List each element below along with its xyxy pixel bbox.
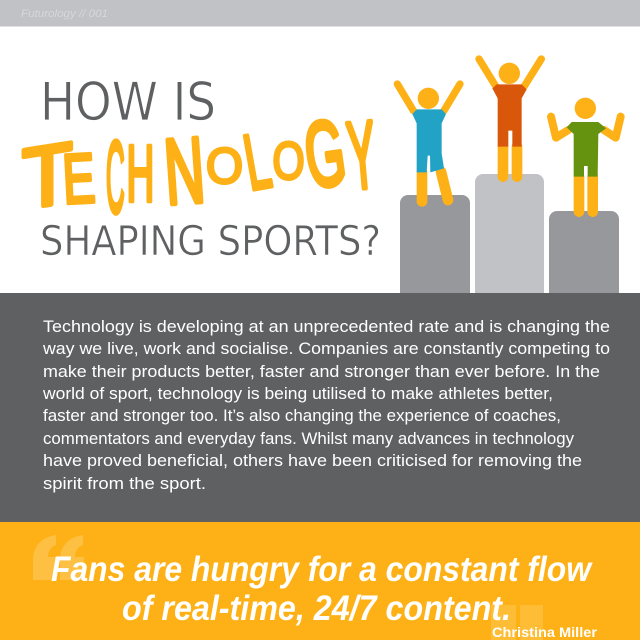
title word: technology: N <box>161 119 208 225</box>
figure: orange athlete <box>479 59 541 177</box>
title word: technology <box>22 100 380 234</box>
intro text: Technology is developing at an unprecedented rate and is changing the <box>43 318 610 336</box>
title word: technology: L <box>238 118 277 207</box>
top bar <box>0 0 640 26</box>
quote text <box>51 550 594 628</box>
podium blocks <box>400 174 619 293</box>
quote panel <box>0 522 640 640</box>
intro text: way we live, work and socialise. Companies are constantly competing to <box>42 340 610 358</box>
title word: technology: O <box>206 139 243 194</box>
title word: technology: H <box>126 130 154 219</box>
title word: technology: C <box>106 120 125 234</box>
intro text: world of sport, technology is being utilised to make athletes better, <box>42 385 553 403</box>
title word: technology: E <box>61 139 97 219</box>
opening quote mark <box>33 535 84 580</box>
intro panel <box>0 293 640 522</box>
title line: how is: HOW IS <box>40 72 216 133</box>
top bar: Futurology // 001 <box>21 8 108 20</box>
quote text: Fans are hungry for a constant flow <box>51 550 594 589</box>
figure: green athlete <box>551 98 621 212</box>
podium illustration <box>397 59 621 293</box>
quote attribution: Christina Miller <box>492 624 598 640</box>
intro text <box>42 318 610 493</box>
title word: technology: T <box>22 123 73 227</box>
closing quote mark <box>491 605 543 640</box>
intro text: make their products better, faster and stronger than ever before. In the <box>43 363 600 381</box>
title word: technology: Y <box>344 101 380 210</box>
figure: blue athlete <box>397 84 460 201</box>
intro text: spirit from the sport. <box>43 475 206 493</box>
quote text: of real-time, 24/7 content. <box>122 589 511 628</box>
intro text: faster and stronger too. It’s also changing the experience of coaches, <box>43 407 561 425</box>
title word: technology: G <box>298 100 352 208</box>
title line: shaping sports: SHAPING SPORTS? <box>40 217 381 265</box>
title <box>22 72 381 265</box>
title word: technology: O <box>272 132 305 191</box>
intro text: have proved beneficial, others have been criticised for removing the <box>43 452 582 470</box>
intro text: commentators and everyday fans. Whilst many advances in technology <box>43 430 575 448</box>
